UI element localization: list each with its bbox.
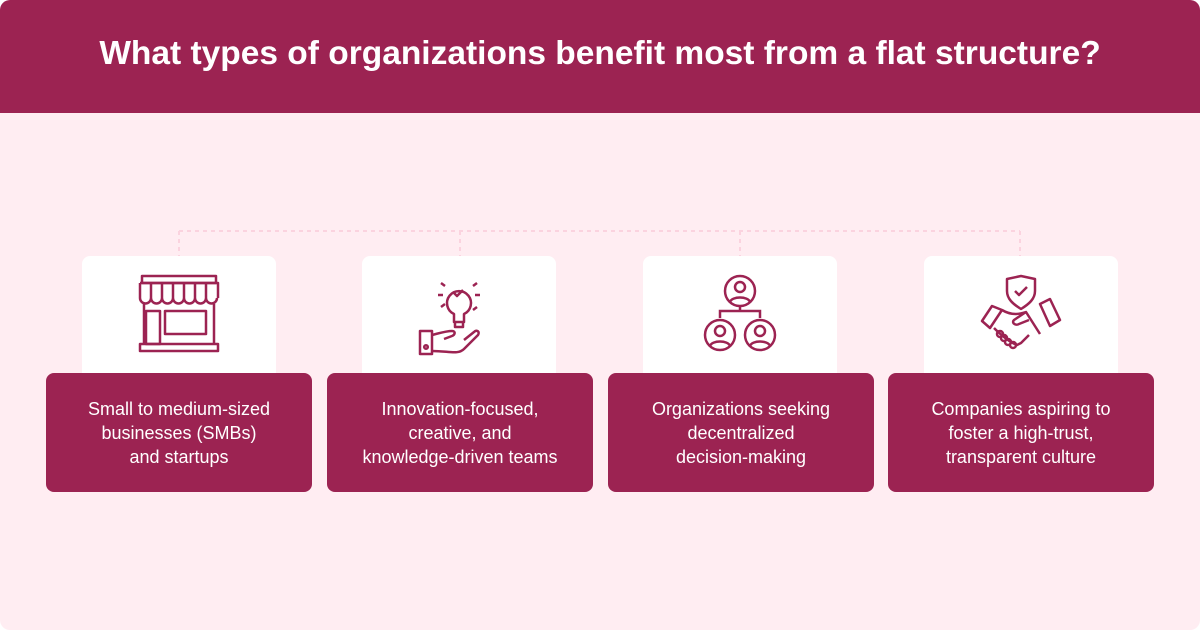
text box 3: Organizations seeking xyxy=(652,398,830,418)
title: What types of organizations benefit most from a flat structure? xyxy=(99,35,1101,72)
text box 4 xyxy=(888,373,1154,492)
text box 1: and startups xyxy=(129,446,229,466)
text box 4: Companies aspiring to xyxy=(931,398,1111,418)
card: icon org chart xyxy=(643,256,837,381)
text box 1 xyxy=(46,373,312,492)
text box 4: transparent culture xyxy=(946,446,1096,466)
text box 2: creative, and xyxy=(408,422,512,442)
text box 3: decentralized xyxy=(687,422,795,442)
text box 2: Innovation-focused, xyxy=(381,398,539,418)
text box 3 xyxy=(608,373,874,492)
text box 1: Small to medium-sized xyxy=(88,398,270,418)
text box 1: businesses (SMBs) xyxy=(101,422,257,442)
card: icon lightbulb hand xyxy=(362,256,556,381)
text box 4: foster a high-trust, xyxy=(948,422,1094,442)
title xyxy=(0,0,1200,113)
text box 2 xyxy=(327,373,593,492)
text box 3: decision-making xyxy=(676,446,806,466)
text box 2: knowledge-driven teams xyxy=(362,446,558,466)
card: icon handshake shield xyxy=(924,256,1118,381)
card: icon store xyxy=(82,256,276,381)
